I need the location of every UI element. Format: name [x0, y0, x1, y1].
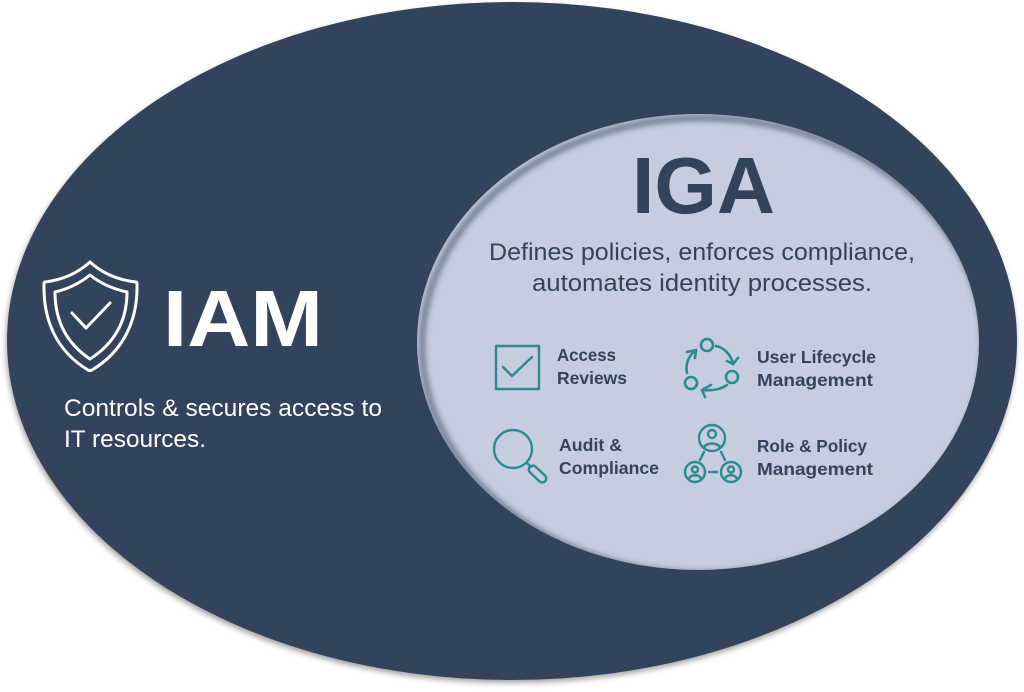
label: User Lifecycle Management: Management	[757, 370, 873, 390]
heading: IAM: IAM	[163, 274, 323, 363]
label: Role & Policy Management	[757, 436, 873, 479]
icon: user lifecycle cycle	[685, 339, 738, 397]
icon: role and policy people network	[685, 425, 741, 482]
panel: IGA inner ellipse	[417, 114, 984, 574]
text: IAM description	[64, 395, 382, 453]
label: Access Reviews: Access	[557, 345, 616, 365]
label: Access Reviews	[557, 345, 627, 388]
label: Role & Policy Management: Management	[757, 459, 873, 479]
text: IGA description	[489, 239, 915, 297]
label: Audit & Compliance: Compliance	[559, 458, 659, 478]
label: Role & Policy Management: Role & Policy	[757, 436, 867, 456]
label: Audit & Compliance	[559, 435, 659, 478]
icon: shield with check	[44, 262, 137, 370]
icon: access reviews checkbox	[496, 346, 539, 389]
heading: IGA: IGA	[632, 141, 775, 230]
text: IAM description: Controls & secures access to	[64, 395, 382, 422]
label: Access Reviews: Reviews	[557, 368, 627, 388]
text: IAM description: IT resources.	[64, 426, 206, 453]
icon: audit magnifier	[494, 430, 548, 484]
text: IGA description: automates identity processes.	[532, 270, 872, 297]
label: User Lifecycle Management	[757, 347, 876, 390]
text: IGA description: Defines policies, enforces compliance,	[489, 239, 915, 266]
label: User Lifecycle Management: User Lifecycle	[757, 347, 876, 367]
label: Audit & Compliance: Audit &	[559, 435, 622, 455]
